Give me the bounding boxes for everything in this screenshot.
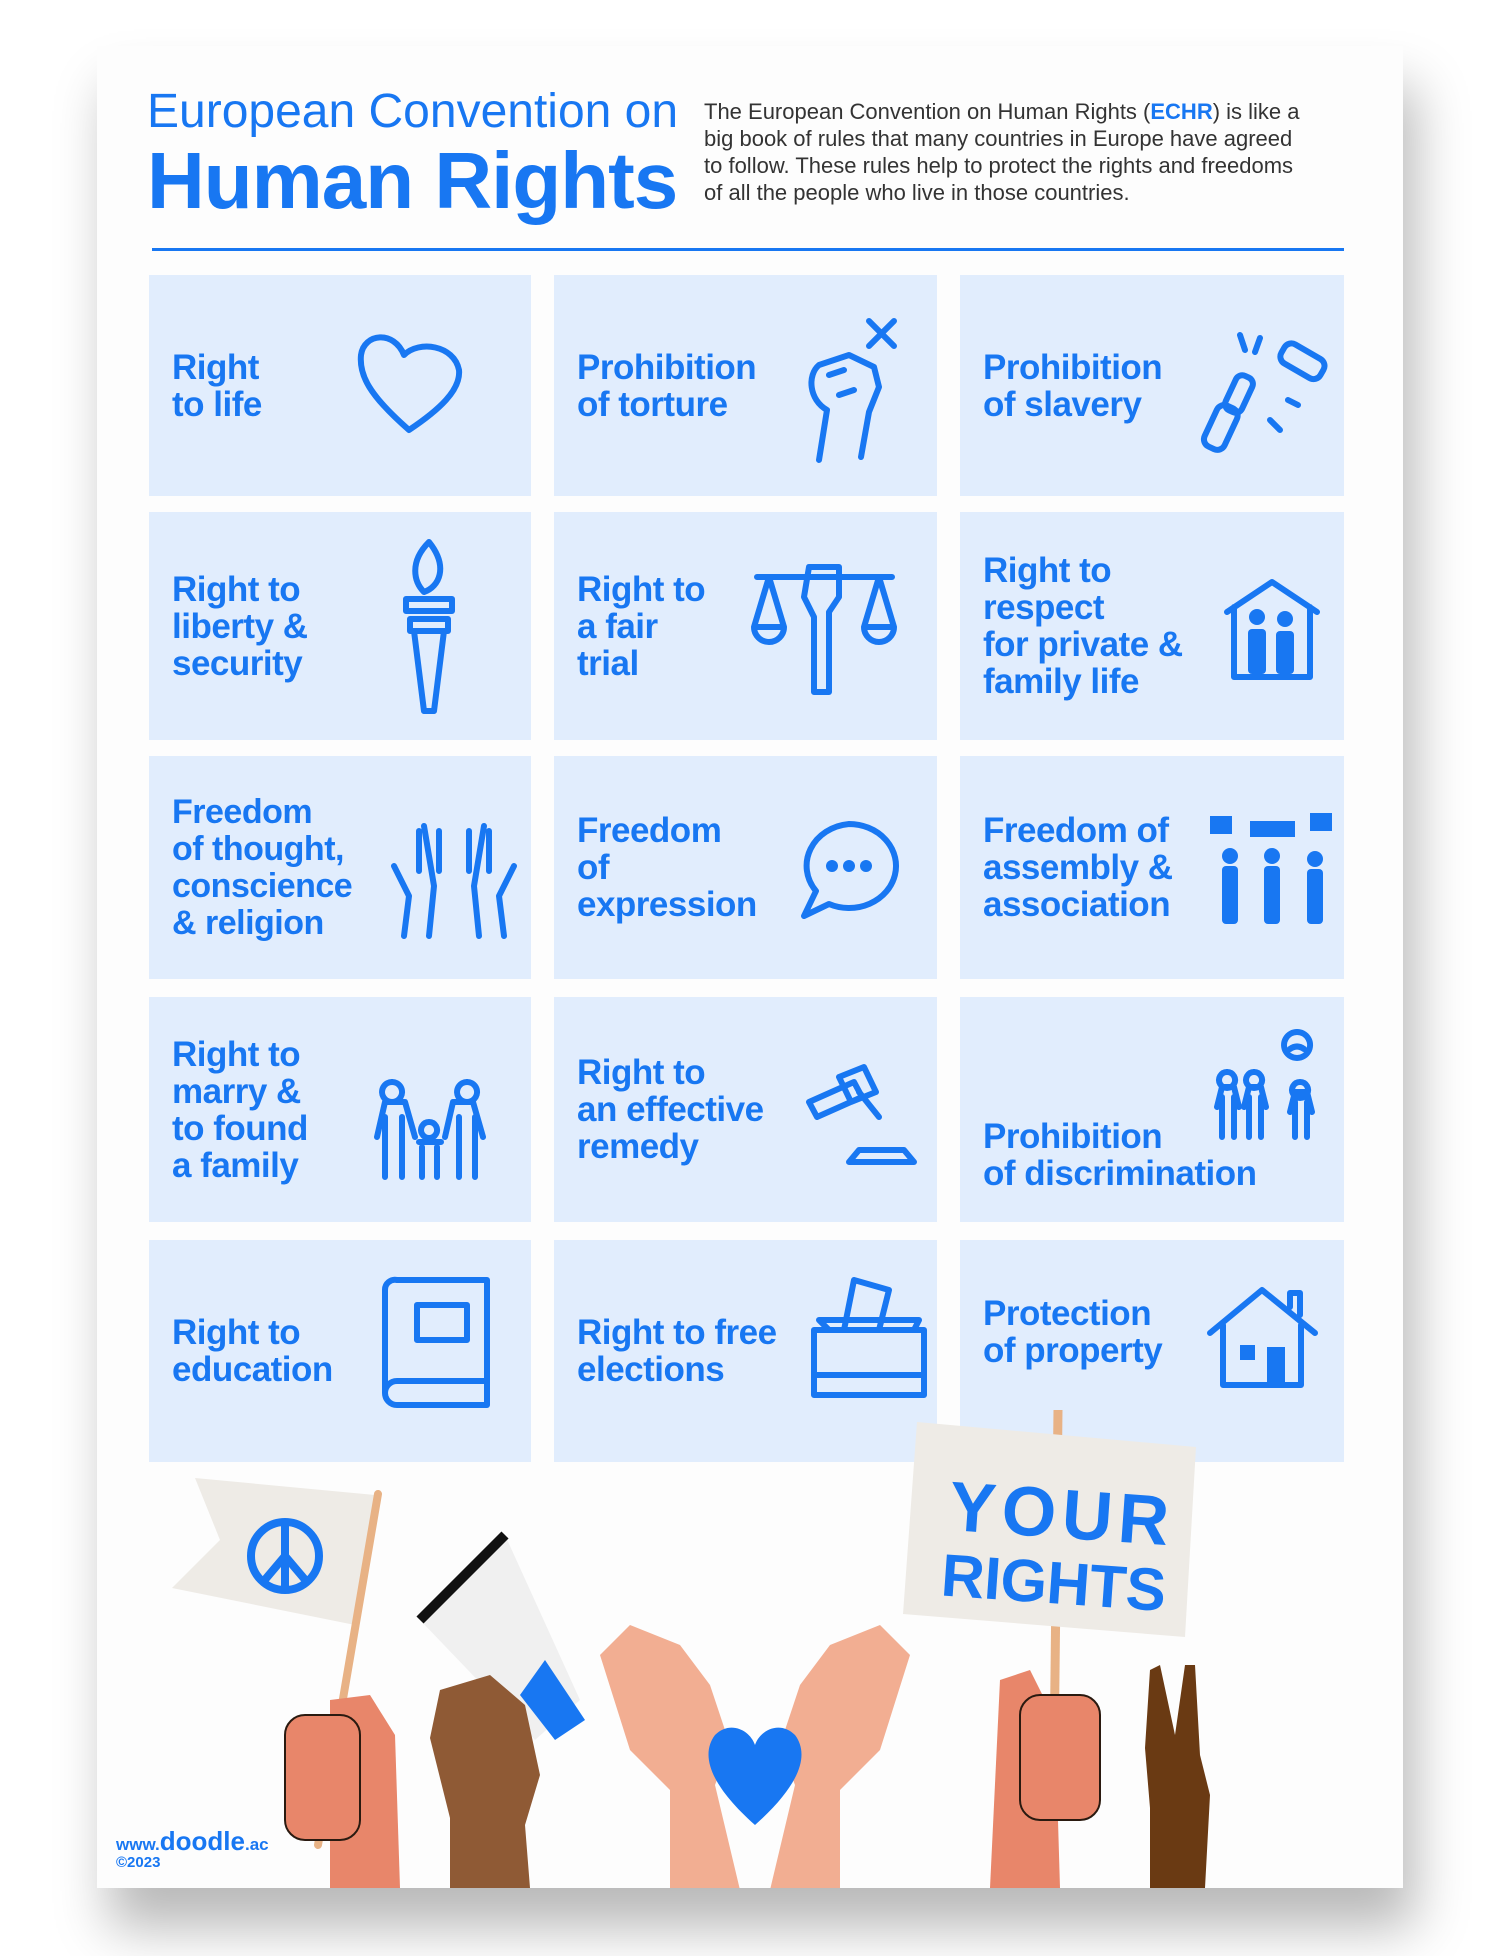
panel: education: education xyxy=(172,1350,333,1389)
panel: private life xyxy=(960,512,1344,740)
panel: expression: of xyxy=(577,848,609,887)
icon: heart xyxy=(358,334,462,434)
panel: expression xyxy=(554,756,937,979)
panel: right to life xyxy=(149,275,531,496)
panel: liberty xyxy=(149,512,531,740)
intro text: to follow. These rules help to protect the rights and freedoms xyxy=(704,153,1293,178)
icon: broken chain xyxy=(1200,332,1328,453)
panel: elections: elections xyxy=(577,1350,724,1389)
panel: property xyxy=(960,1240,1344,1462)
sign your rights: RIGHTS xyxy=(939,1541,1168,1624)
title: Human Rights xyxy=(147,136,677,225)
footer: doodle.ac xyxy=(116,1826,269,1871)
panel: liberty: Right to xyxy=(172,570,300,608)
hand peace xyxy=(1145,1665,1210,1888)
panel: discrimination: Prohibition xyxy=(983,1117,1162,1156)
panel: fair trial: a fair xyxy=(577,606,658,646)
icon: scales xyxy=(751,564,897,695)
icon: praying hands xyxy=(391,823,517,939)
panel: torture: of torture xyxy=(577,384,728,424)
hand right fist xyxy=(990,1670,1100,1888)
panel: thought: conscience xyxy=(172,866,352,904)
intro text: of all the people who live in those countries. xyxy=(704,180,1130,205)
intro text: The European Convention on Human Rights (ECHR) is like a xyxy=(704,99,1300,124)
panel: elections: Right to free xyxy=(577,1313,777,1352)
icon: fist xyxy=(808,318,897,463)
panel: slavery: Prohibition xyxy=(983,348,1162,386)
panel: remedy xyxy=(554,997,937,1222)
sign your rights xyxy=(903,1410,1196,1850)
panel: education: Right to xyxy=(172,1313,300,1352)
panel: thought: Freedom xyxy=(172,792,312,830)
panel: elections xyxy=(554,1240,937,1462)
panel: remedy: Right to xyxy=(577,1053,705,1092)
intro text xyxy=(704,99,1300,205)
sign your rights: YOUR xyxy=(947,1467,1172,1560)
panel: marry: to found xyxy=(172,1108,308,1148)
panel: private life: respect xyxy=(983,588,1104,627)
panel: fair trial xyxy=(554,512,937,740)
illustration: protest hands xyxy=(172,1410,1210,1888)
panel: thought: of thought, xyxy=(172,830,344,868)
megaphone xyxy=(420,1535,585,1740)
icon: protesters xyxy=(1210,813,1332,924)
panel: right to life: Right xyxy=(172,348,259,386)
panel: assembly: association xyxy=(983,885,1170,924)
hand left fist xyxy=(285,1695,400,1888)
panel: slavery xyxy=(960,275,1344,496)
footer: doodle.ac: ©2023 xyxy=(116,1854,160,1871)
title xyxy=(147,85,678,225)
panel: torture: Prohibition xyxy=(577,348,756,386)
panel: property: of property xyxy=(983,1331,1162,1370)
footer: doodle.ac: www.doodle.ac xyxy=(116,1826,269,1856)
panel: thought xyxy=(149,756,531,979)
panel: fair trial: trial xyxy=(577,644,639,682)
panel: marry: marry & xyxy=(172,1072,301,1110)
panel: private life: Right to xyxy=(983,551,1111,590)
panel: marry: Right to xyxy=(172,1034,300,1074)
icon: ballot box xyxy=(811,1277,927,1398)
title: European Convention on xyxy=(147,85,678,138)
panel: torture xyxy=(554,275,937,496)
icon: speech bubble xyxy=(801,821,899,919)
panel: education xyxy=(149,1240,531,1462)
panel: right to life: to life xyxy=(172,384,262,424)
icon: house xyxy=(1207,1286,1318,1388)
panel: assembly: Freedom of xyxy=(983,811,1169,850)
panel: discrimination xyxy=(960,997,1344,1222)
panel: private life: for private & xyxy=(983,625,1183,664)
icon: family house xyxy=(1224,579,1320,680)
flag xyxy=(172,1478,378,1845)
panel: assembly: assembly & xyxy=(983,848,1173,887)
heart hands xyxy=(600,1625,910,1890)
panel: property: Protection xyxy=(983,1294,1151,1333)
hand brown xyxy=(430,1675,540,1888)
icon: torch xyxy=(403,539,455,714)
panel: fair trial: Right to xyxy=(577,570,705,608)
panel: remedy: remedy xyxy=(577,1127,699,1166)
panel: marry: a family xyxy=(172,1146,298,1184)
panel: expression: Freedom xyxy=(577,811,721,850)
panel: slavery: of slavery xyxy=(983,384,1141,424)
panel: private life: family life xyxy=(983,662,1139,701)
panel: liberty: liberty & xyxy=(172,606,308,646)
icon: gavel xyxy=(806,1064,917,1165)
icon: book xyxy=(382,1276,490,1408)
panel: assembly xyxy=(960,756,1344,979)
icon: excluded person xyxy=(1214,1029,1315,1140)
panel: expression: expression xyxy=(577,885,757,924)
panel: liberty: security xyxy=(172,644,302,682)
icon: family xyxy=(374,1079,486,1180)
panel: discrimination: of discrimination xyxy=(983,1154,1256,1193)
intro text: big book of rules that many countries in Europe have agreed xyxy=(704,126,1292,151)
panel: marry xyxy=(149,997,531,1222)
panel: thought: & religion xyxy=(172,904,324,942)
panel: remedy: an effective xyxy=(577,1090,764,1129)
